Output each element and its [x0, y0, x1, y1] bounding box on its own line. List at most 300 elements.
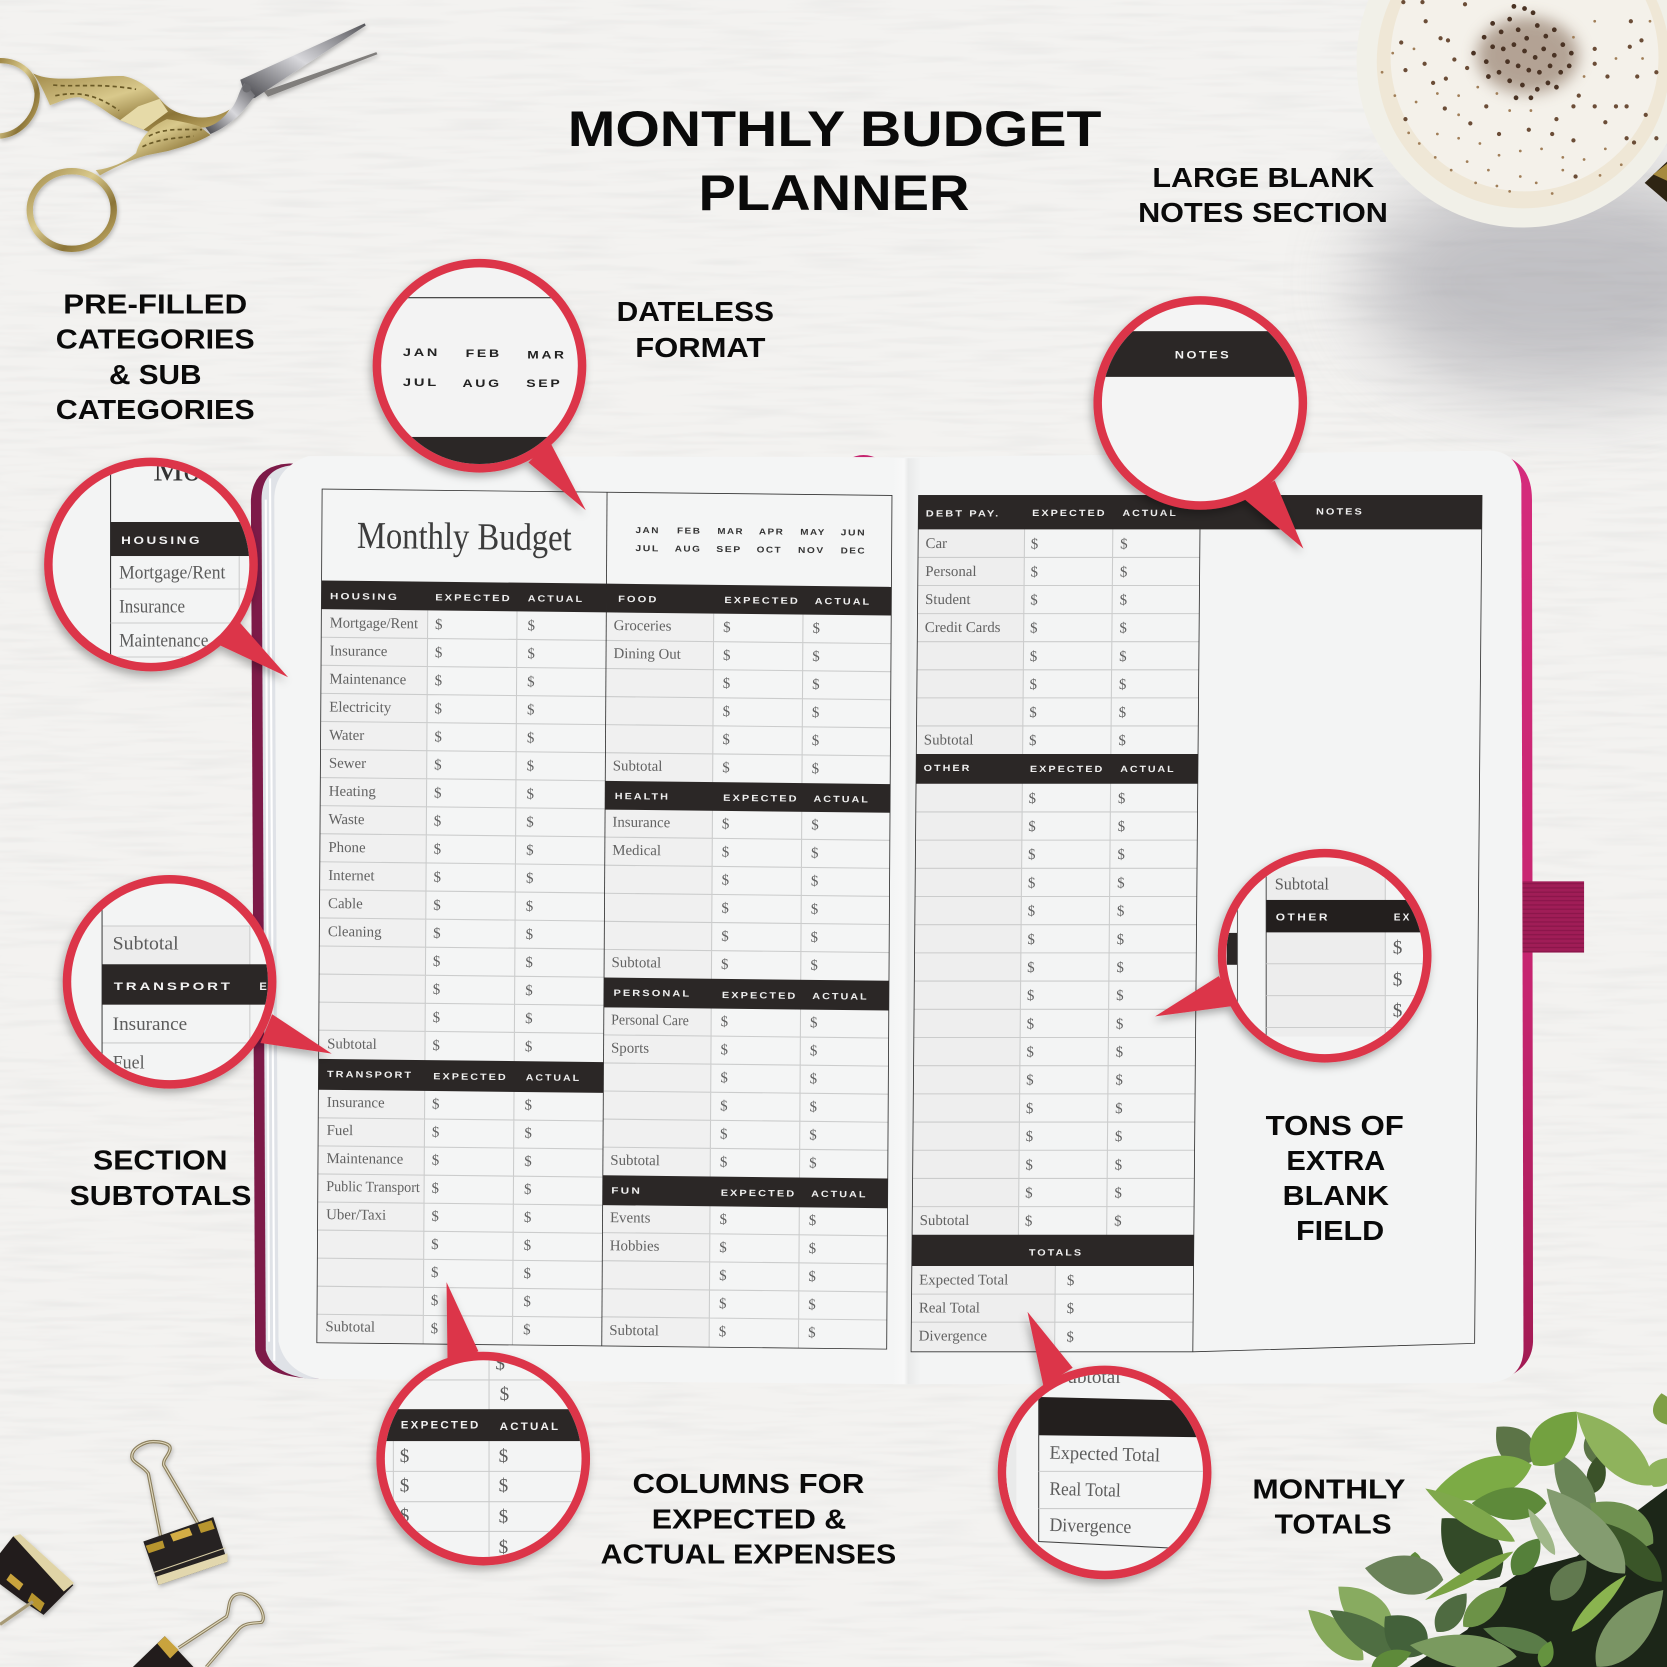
month selector: SEP — [716, 544, 742, 554]
food, health, personal and fun rows: $ — [809, 1099, 817, 1115]
month selector: OCT — [757, 544, 782, 555]
debt, other and totals rows: $ — [1027, 988, 1034, 1004]
callout: monthly totals — [997, 1312, 1212, 1580]
debt, other and totals rows: Expected Total — [919, 1273, 1008, 1289]
section headers — [318, 580, 891, 1208]
food, health, personal and fun rows: Subtotal — [610, 1153, 660, 1169]
label: section subtotals: SECTION — [93, 1144, 228, 1175]
month selector — [635, 525, 866, 556]
food, health, personal and fun rows: $ — [719, 1268, 727, 1284]
food, health, personal and fun rows: $ — [720, 1070, 728, 1086]
label: columns for expected and actual: ACTUAL EXPENSES — [601, 1538, 896, 1569]
section headers: EXPECTED — [1032, 508, 1107, 518]
callout: housing category: Insurance — [119, 596, 185, 617]
heading: Monthly Budget: Monthly Budget — [357, 515, 572, 559]
icon: gold stork scissors — [0, 23, 377, 249]
callout: expected and actual columns: $ — [499, 1476, 508, 1497]
label: pre-filled categories — [56, 289, 255, 425]
label: large blank notes section: LARGE BLANK — [1152, 162, 1374, 193]
month selector: MAR — [717, 526, 744, 536]
food, health, personal and fun rows: $ — [811, 846, 819, 862]
housing rows: $ — [433, 898, 441, 914]
food, health, personal and fun rows: Dining Out — [613, 646, 682, 663]
transport rows: $ — [524, 1126, 532, 1142]
callout: transport subtotal: E — [259, 981, 269, 993]
food, health, personal and fun rows: $ — [721, 901, 729, 917]
debt, other and totals rows: $ — [1116, 1045, 1123, 1061]
debt, other and totals rows: $ — [1120, 593, 1127, 609]
debt, other and totals rows: $ — [1119, 649, 1127, 665]
housing rows: $ — [433, 954, 440, 970]
food, health, personal and fun rows: $ — [810, 958, 818, 974]
debt, other and totals rows: $ — [1067, 1273, 1074, 1289]
callout: notes: NOTES — [1175, 349, 1231, 361]
housing rows: Heating — [329, 784, 376, 800]
food, health, personal and fun rows: $ — [812, 733, 819, 749]
debt, other and totals rows: $ — [1028, 904, 1035, 920]
housing rows: $ — [434, 729, 442, 745]
housing rows: $ — [432, 1038, 440, 1054]
title — [568, 101, 1101, 221]
housing rows: $ — [527, 674, 535, 690]
housing rows: Sewer — [329, 756, 366, 772]
food, health, personal and fun rows: $ — [723, 648, 730, 664]
transport rows: $ — [524, 1182, 532, 1198]
debt, other and totals rows: Personal — [925, 564, 977, 580]
housing rows: $ — [527, 702, 535, 718]
housing rows: Cleaning — [328, 924, 382, 941]
debt, other and totals rows: $ — [1067, 1301, 1074, 1317]
debt, other and totals rows: $ — [1028, 847, 1036, 863]
transport rows: Insurance — [327, 1095, 385, 1111]
callout: other section: EX — [1394, 913, 1411, 924]
debt, other and totals rows: $ — [1117, 847, 1125, 863]
debt, other and totals rows: Divergence — [919, 1329, 987, 1345]
callout: dateless months: MAR — [527, 349, 567, 361]
callout: expected and actual columns: $ — [400, 1446, 409, 1467]
icon: green plant — [1299, 1391, 1667, 1667]
debt, other and totals rows: $ — [1116, 960, 1124, 976]
title: PLANNER — [698, 165, 970, 221]
housing rows: $ — [527, 646, 535, 662]
transport rows: $ — [431, 1237, 439, 1253]
debt, other and totals rows: $ — [1027, 932, 1035, 948]
callout: monthly totals: Expected Total — [1049, 1443, 1160, 1467]
callout: expected and actual columns: $ — [400, 1505, 409, 1526]
elastic pen loop — [1522, 881, 1584, 953]
debt, other and totals rows: $ — [1030, 593, 1038, 609]
debt, other and totals rows: Subtotal — [920, 1213, 969, 1229]
housing rows: $ — [434, 701, 442, 717]
callout: dateless months: JAN — [403, 347, 440, 359]
debt, other and totals rows: $ — [1115, 1157, 1122, 1173]
label: large blank notes section: NOTES SECTION — [1138, 197, 1388, 228]
housing rows: $ — [434, 757, 442, 773]
section headers: ACTUAL — [811, 1189, 867, 1199]
callout: housing category — [44, 452, 288, 677]
transport rows: $ — [431, 1209, 439, 1225]
month selector: APR — [759, 526, 784, 537]
section headers: ACTUAL — [1120, 764, 1176, 774]
debt, other and totals rows: $ — [1114, 1186, 1122, 1202]
callout: expected and actual columns: $ — [495, 1353, 505, 1374]
callout: dateless months: AUG — [462, 378, 502, 390]
food, health, personal and fun rows: $ — [812, 705, 819, 721]
callout: dateless months: SEP — [526, 378, 562, 390]
housing rows: Water — [329, 728, 364, 744]
label: tons of extra blank field — [1266, 1110, 1404, 1246]
debt, other and totals rows: $ — [1027, 1016, 1034, 1032]
food, health, personal and fun rows: $ — [719, 1324, 726, 1340]
food, health, personal and fun rows — [609, 618, 820, 1341]
callout: dateless months — [372, 259, 587, 510]
month selector: AUG — [675, 543, 701, 554]
housing rows: $ — [527, 730, 534, 746]
label: pre-filled categories: CATEGORIES — [56, 324, 255, 355]
food, health, personal and fun rows: $ — [722, 844, 729, 861]
food, health, personal and fun rows: Hobbies — [610, 1238, 660, 1255]
housing rows: $ — [526, 843, 534, 859]
housing rows: Electricity — [329, 700, 392, 716]
food, health, personal and fun rows: Personal Care — [611, 1012, 689, 1029]
debt, other and totals rows: $ — [1117, 932, 1124, 948]
debt, other and totals rows: $ — [1119, 677, 1126, 693]
label: monthly totals — [1252, 1473, 1405, 1540]
section headers: DEBT PAY. — [926, 509, 1000, 519]
debt, other and totals rows: $ — [1025, 1214, 1032, 1230]
section headers: ACTUAL — [812, 991, 869, 1002]
section headers: TOTALS — [1029, 1247, 1083, 1257]
transport rows: $ — [524, 1238, 531, 1254]
section headers: FOOD — [618, 594, 659, 604]
callout: expected and actual columns: EXPECTED — [401, 1419, 481, 1431]
debt, other and totals rows: $ — [1026, 1045, 1034, 1061]
housing rows: $ — [433, 1010, 440, 1026]
debt, other and totals rows: $ — [1118, 819, 1125, 835]
food, health, personal and fun rows: $ — [811, 902, 818, 918]
debt, other and totals rows: $ — [1030, 677, 1037, 693]
food, health, personal and fun rows: $ — [719, 1296, 726, 1312]
housing rows: $ — [527, 618, 535, 634]
housing rows: $ — [525, 1039, 532, 1055]
callout: housing category: Maintenance — [119, 630, 208, 651]
callout: expected and actual columns — [376, 1282, 591, 1567]
food, health, personal and fun rows: $ — [809, 1213, 816, 1229]
transport rows: Public Transport — [326, 1179, 421, 1196]
callout: transport subtotal: TRANSPORT — [114, 981, 233, 993]
food, health, personal and fun rows: $ — [809, 1156, 817, 1172]
debt, other and totals rows: $ — [1066, 1329, 1074, 1345]
transport rows: $ — [432, 1153, 439, 1169]
housing rows: $ — [433, 982, 440, 998]
debt, other and totals rows: $ — [1028, 819, 1036, 835]
housing rows: $ — [434, 785, 441, 802]
housing rows: $ — [526, 871, 533, 887]
label: monthly totals: TOTALS — [1275, 1509, 1392, 1540]
callout: monthly totals: Real Total — [1049, 1479, 1121, 1502]
section headers: FUN — [611, 1185, 642, 1196]
transport rows: $ — [523, 1322, 531, 1338]
food, health, personal and fun rows: $ — [720, 1098, 728, 1114]
debt, other and totals rows: $ — [1117, 904, 1124, 920]
food, health, personal and fun rows: $ — [810, 1043, 817, 1059]
title: MONTHLY BUDGET — [568, 101, 1101, 157]
food, health, personal and fun rows: Sports — [611, 1040, 649, 1057]
debt, other and totals rows: $ — [1026, 1129, 1033, 1145]
housing rows: $ — [525, 983, 533, 999]
transport rows: $ — [432, 1097, 440, 1113]
callout: other section: $ — [1393, 1000, 1402, 1021]
debt, other and totals rows: Subtotal — [924, 733, 974, 749]
food, health, personal and fun rows: Subtotal — [609, 1323, 659, 1339]
debt, other and totals rows: $ — [1025, 1186, 1033, 1202]
debt, other and totals rows: $ — [1030, 621, 1038, 637]
section headers: ACTUAL — [528, 593, 584, 604]
debt, other and totals rows: $ — [1116, 988, 1124, 1004]
debt, other and totals rows: $ — [1115, 1101, 1123, 1117]
callout: monthly totals: Divergence — [1049, 1515, 1132, 1538]
debt, other and totals rows: Student — [925, 592, 971, 608]
month selector: NOV — [798, 545, 825, 555]
housing rows: Waste — [329, 812, 365, 828]
section headers: OTHER — [924, 763, 971, 773]
callout: other section: $ — [1393, 938, 1402, 959]
housing rows — [327, 615, 535, 1055]
housing rows: $ — [525, 1011, 533, 1027]
debt, other and totals rows: $ — [1026, 1073, 1034, 1089]
section headers: HEALTH — [615, 791, 670, 802]
debt, other and totals rows: $ — [1027, 960, 1035, 976]
food, health, personal and fun rows: $ — [721, 929, 729, 945]
month selector: JUN — [841, 527, 866, 538]
callout: other section: OTHER — [1276, 913, 1330, 924]
housing rows: Mortgage/Rent — [330, 615, 419, 632]
section headers: EXPECTED — [433, 1071, 508, 1082]
label: section subtotals — [70, 1144, 251, 1211]
debt, other and totals rows: $ — [1030, 649, 1037, 665]
month selector: MAY — [800, 527, 826, 537]
label: columns for expected and actual — [601, 1468, 896, 1569]
housing rows: $ — [525, 955, 533, 971]
label: pre-filled categories: CATEGORIES — [56, 394, 255, 425]
label: large blank notes section — [1138, 162, 1388, 228]
label: tons of extra blank field: FIELD — [1296, 1215, 1384, 1246]
housing rows: $ — [434, 814, 441, 830]
housing rows: $ — [433, 870, 441, 886]
callout: transport subtotal — [63, 875, 332, 1090]
right page table — [911, 495, 1482, 1352]
notebook: covers and pages — [251, 451, 1584, 1384]
food, health, personal and fun rows: $ — [812, 621, 820, 637]
section headers: ACTUAL — [1122, 508, 1178, 518]
label: pre-filled categories: & SUB — [109, 359, 201, 390]
housing rows: $ — [435, 617, 443, 633]
housing rows: Cable — [328, 896, 363, 912]
label: columns for expected and actual: COLUMNS FOR — [633, 1468, 864, 1499]
food, health, personal and fun rows: $ — [720, 1126, 728, 1143]
transport rows: $ — [524, 1154, 532, 1170]
transport rows: $ — [432, 1181, 439, 1197]
callout: other section: $ — [1393, 970, 1402, 991]
callout: expected and actual columns: $ — [499, 1506, 508, 1527]
debt, other and totals rows: $ — [1031, 565, 1038, 581]
food, health, personal and fun rows: $ — [721, 1014, 728, 1030]
food, health, personal and fun rows: $ — [719, 1212, 727, 1228]
transport rows: $ — [524, 1210, 531, 1226]
month selector: FEB — [677, 525, 701, 536]
debt, other and totals rows: $ — [1029, 733, 1037, 749]
debt, other and totals rows: Car — [926, 536, 947, 552]
debt, other and totals rows — [919, 536, 1128, 1345]
callout: expected and actual columns: $ — [400, 1476, 409, 1497]
section headers: ACTUAL — [815, 596, 871, 607]
section headers: NOTES — [1316, 507, 1364, 516]
debt, other and totals rows: $ — [1115, 1073, 1123, 1089]
transport rows: $ — [523, 1294, 531, 1310]
callout: other section — [1155, 848, 1432, 1063]
housing rows: $ — [433, 926, 441, 942]
label: tons of extra blank field: TONS OF — [1266, 1110, 1404, 1141]
food, health, personal and fun rows: $ — [808, 1269, 816, 1285]
callout: housing category: Mo — [153, 452, 200, 489]
food, health, personal and fun rows: $ — [722, 816, 729, 833]
transport rows: Subtotal — [325, 1319, 375, 1336]
food, health, personal and fun rows: $ — [812, 677, 820, 693]
housing rows: $ — [527, 758, 534, 775]
food, health, personal and fun rows: $ — [812, 649, 820, 665]
callout: other section: Subtotal — [1275, 874, 1329, 893]
housing rows: $ — [526, 815, 534, 831]
food, health, personal and fun rows: $ — [810, 1015, 818, 1031]
section headers: HOUSING — [330, 591, 399, 602]
callout: dateless months: JUL — [403, 377, 439, 389]
debt, other and totals rows: $ — [1029, 705, 1037, 721]
food, health, personal and fun rows: $ — [811, 930, 818, 946]
housing rows: $ — [526, 786, 534, 803]
debt, other and totals rows: $ — [1120, 536, 1128, 552]
month selector: JUL — [635, 543, 660, 553]
housing rows: Insurance — [330, 643, 388, 660]
label: pre-filled categories: PRE-FILLED — [63, 289, 247, 320]
callout: monthly totals: Subtotal — [1057, 1367, 1121, 1388]
food, health, personal and fun rows: $ — [721, 957, 729, 973]
food, health, personal and fun rows: Groceries — [614, 618, 672, 635]
transport rows: $ — [431, 1293, 438, 1309]
callout: housing category: HOUSING — [121, 535, 202, 547]
housing rows: Subtotal — [327, 1036, 377, 1053]
housing rows: $ — [435, 645, 442, 661]
housing rows: $ — [434, 842, 441, 858]
label: columns for expected and actual: EXPECTED & — [652, 1503, 846, 1534]
icon: coffee cup with shadow — [1357, 0, 1667, 393]
food, health, personal and fun rows: $ — [809, 1127, 817, 1144]
transport rows: $ — [432, 1125, 439, 1141]
housing rows: Phone — [328, 840, 366, 856]
section headers: EXPECTED — [723, 793, 799, 804]
label: tons of extra blank field: EXTRA — [1286, 1145, 1385, 1176]
debt, other and totals rows: $ — [1117, 875, 1125, 891]
food, health, personal and fun rows: Subtotal — [612, 955, 661, 972]
debt, other and totals rows: Real Total — [919, 1301, 980, 1317]
debt, other and totals rows: $ — [1119, 705, 1126, 721]
debt, other and totals rows: $ — [1025, 1157, 1033, 1173]
transport rows: $ — [431, 1265, 439, 1281]
food, health, personal and fun rows: $ — [809, 1241, 816, 1257]
section headers: TRANSPORT — [327, 1069, 413, 1080]
section headers: EXPECTED — [1030, 764, 1104, 774]
left page table — [317, 489, 892, 1349]
housing rows: $ — [435, 673, 442, 689]
callout: transport subtotal: Fuel — [113, 1052, 145, 1073]
debt, other and totals rows: $ — [1031, 536, 1038, 552]
callout: expected and actual columns: $ — [499, 1446, 508, 1467]
food, health, personal and fun rows: $ — [808, 1325, 816, 1341]
section headers: EXPECTED — [721, 1188, 796, 1199]
food, health, personal and fun rows: $ — [723, 704, 730, 720]
food, health, personal and fun rows: $ — [723, 676, 730, 692]
icon: binder clips — [0, 1442, 263, 1667]
callout: expected and actual columns: $ — [499, 1537, 508, 1558]
month selector: JAN — [635, 525, 660, 535]
callout: expected and actual columns: $ — [500, 1384, 509, 1405]
food, health, personal and fun rows: $ — [720, 1042, 728, 1058]
section headers: EXPECTED — [722, 990, 797, 1001]
label: dateless format: FORMAT — [635, 332, 766, 363]
food, health, personal and fun rows: $ — [719, 1240, 727, 1256]
transport rows: $ — [431, 1321, 438, 1337]
food, health, personal and fun rows: Subtotal — [613, 758, 662, 775]
label: dateless format: DATELESS — [617, 296, 774, 327]
food, health, personal and fun rows: $ — [812, 761, 819, 777]
callout: transport subtotal: Insurance — [113, 1014, 187, 1035]
food, health, personal and fun rows: $ — [720, 1155, 727, 1171]
housing rows: $ — [526, 899, 533, 915]
callout: housing category: Mortgage/Rent — [119, 562, 226, 583]
food, health, personal and fun rows: $ — [722, 732, 730, 748]
label: section subtotals: SUBTOTALS — [70, 1180, 251, 1211]
month selector: DEC — [841, 545, 866, 556]
debt, other and totals rows: $ — [1118, 733, 1126, 749]
label: tons of extra blank field: BLANK — [1283, 1180, 1389, 1211]
callout: expected and actual columns: ACTUAL — [500, 1421, 560, 1433]
debt, other and totals rows: $ — [1115, 1129, 1122, 1145]
section headers: EXPECTED — [435, 592, 512, 603]
label: dateless format — [617, 296, 774, 363]
debt, other and totals rows: $ — [1118, 791, 1125, 807]
section headers — [912, 495, 1482, 1266]
housing rows: Internet — [328, 868, 375, 884]
section headers: PERSONAL — [613, 988, 691, 999]
callout: dateless months: FEB — [466, 348, 502, 360]
section headers: EXPECTED — [724, 595, 800, 606]
transport rows: $ — [523, 1266, 531, 1282]
callout: notes — [1093, 296, 1308, 549]
housing rows: $ — [526, 927, 533, 943]
transport rows — [325, 1095, 532, 1338]
food, health, personal and fun rows: Medical — [612, 843, 661, 859]
food, health, personal and fun rows: Events — [610, 1210, 651, 1227]
food, health, personal and fun rows: $ — [722, 873, 729, 889]
debt, other and totals rows: $ — [1028, 875, 1035, 891]
debt, other and totals rows: $ — [1026, 1101, 1033, 1117]
food, health, personal and fun rows: $ — [811, 874, 818, 890]
food, health, personal and fun rows: $ — [723, 620, 731, 636]
food, health, personal and fun rows: $ — [811, 817, 819, 834]
transport rows: Maintenance — [326, 1151, 404, 1168]
housing rows: Maintenance — [329, 671, 407, 688]
label: monthly totals: MONTHLY — [1252, 1473, 1405, 1504]
transport rows: Fuel — [327, 1123, 353, 1139]
